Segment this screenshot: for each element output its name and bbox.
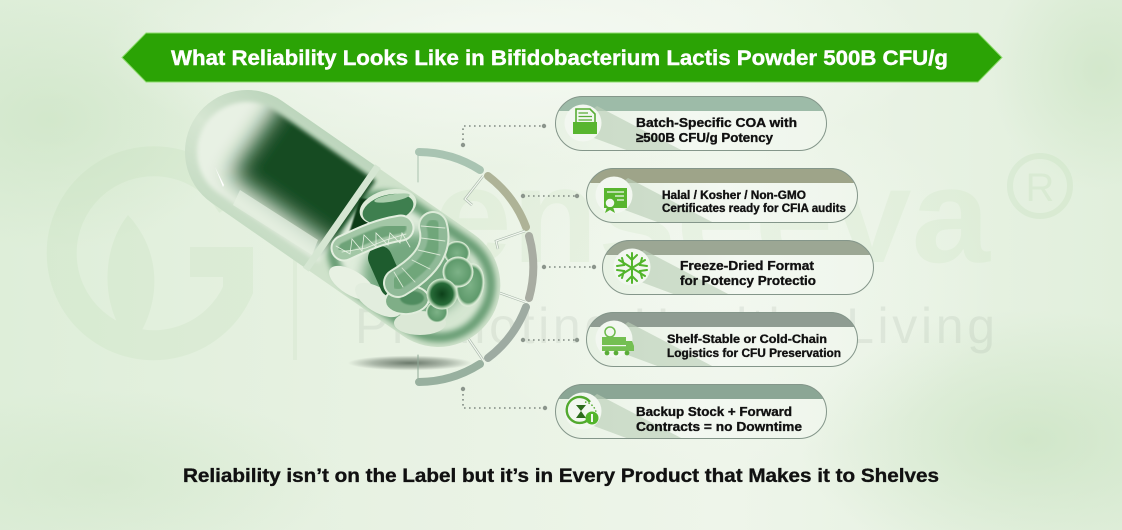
icon: snowflake — [617, 253, 647, 283]
text: logistics: Logistics for CFU Preservation — [667, 346, 841, 360]
title banner — [122, 33, 1002, 82]
text: backup stock: Contracts = no Downtime — [636, 419, 802, 434]
capsule: label highlight — [233, 190, 318, 255]
text: certificates — [662, 190, 846, 215]
text: logistics — [667, 332, 841, 360]
watermark logo — [62, 140, 1070, 360]
panel: logistics — [587, 312, 857, 367]
icon: truck — [602, 327, 634, 355]
watermark: registered mark: R — [1026, 166, 1054, 210]
text: backup stock: Backup Stock + Forward — [636, 404, 792, 419]
text: freeze-dried: Freeze-Dried Format — [680, 258, 815, 273]
text: backup stock — [636, 404, 802, 434]
text: certificates: Halal / Kosher / Non-GMO — [662, 190, 806, 202]
text: freeze-dried — [680, 258, 816, 288]
watermark: registered mark — [1010, 156, 1070, 216]
infographic canvas — [47, 32, 1073, 486]
text: certificates: Certificates ready for CFIA audits — [662, 203, 846, 215]
watermark: brand name: reenseeva — [300, 140, 991, 291]
text: freeze-dried: for Potency Protectio — [680, 273, 816, 288]
bacterium rod 2 — [383, 283, 431, 317]
panel: backup stock — [556, 384, 826, 439]
icon: certificate — [604, 188, 627, 213]
capsule: shell — [185, 90, 500, 347]
capsule — [185, 90, 500, 347]
icon: folder with document — [573, 109, 597, 134]
bacterium rod 4 — [336, 228, 410, 254]
panel: freeze-dried — [603, 240, 873, 295]
footer statement: Reliability isn’t on the Label but it’s in Every Product that Makes it to Shelves — [183, 466, 939, 487]
watermark: divider — [293, 160, 297, 360]
watermark: G leaf mark — [62, 161, 238, 345]
bacterial spheres — [442, 256, 474, 288]
panel: certificates — [587, 168, 857, 223]
title banner: What Reliability Looks Like in Bifidobacterium Lactis Powder 500B CFU/g — [171, 47, 948, 70]
panel: batch COA — [556, 96, 826, 151]
icon: hourglass with coin — [567, 397, 598, 424]
capsule shadow — [348, 356, 472, 370]
segmented ring — [418, 152, 533, 382]
text: logistics: Shelf-Stable or Cold-Chain — [667, 332, 827, 346]
text: batch COA: Batch-Specific COA with — [636, 115, 797, 130]
text: batch COA — [636, 115, 797, 145]
watermark: tagline: Promoting Healthy Living — [355, 298, 995, 354]
bacterium rod 1 — [356, 183, 420, 231]
text: batch COA: ≥500B CFU/g Potency — [636, 130, 774, 145]
bacterium rod 3 — [394, 226, 445, 287]
bacteria cluster — [324, 183, 488, 335]
dotted connectors — [461, 124, 596, 410]
